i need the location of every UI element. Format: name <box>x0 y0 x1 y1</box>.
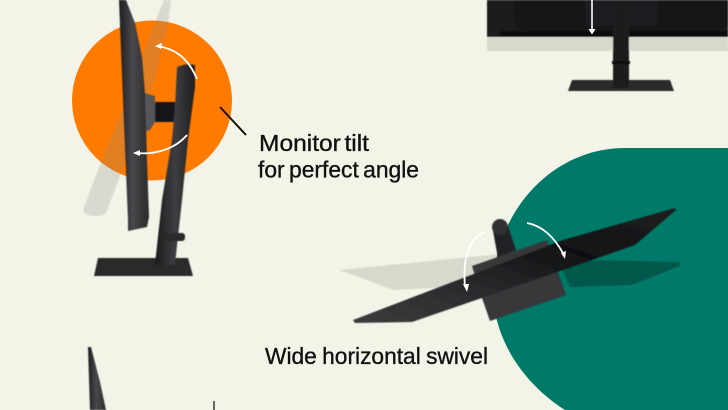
callout line: tilt <box>220 107 246 135</box>
swivel monitor panel <box>353 208 676 323</box>
arrow: tilt forward <box>136 135 187 153</box>
stand mount plate <box>585 0 657 26</box>
panel: orange circle behind tilt monitor <box>72 20 232 180</box>
icon: stand tip, bottom <box>213 401 215 410</box>
stand base <box>568 80 674 91</box>
text: monitor tilt caption <box>258 130 419 182</box>
height lock clip <box>164 233 185 241</box>
icon: swivel ghost shadow on green <box>560 260 680 287</box>
icon: monitor side sliver, bottom left <box>88 347 106 410</box>
panel: green rounded shape <box>493 148 728 410</box>
arrow: tilt back <box>157 46 197 79</box>
text: swivel caption: Wide horizontal swivel <box>265 343 488 369</box>
icon: monitor side view for tilt <box>94 0 195 276</box>
arrow: height down <box>588 0 596 34</box>
monitor stand base <box>94 258 193 276</box>
icon: monitor top view for swivel <box>353 208 676 323</box>
arrow: swivel right <box>527 223 564 255</box>
ghost panel lowered <box>487 37 728 51</box>
monitor panel side <box>119 0 149 231</box>
text: monitor tilt caption: for perfect angle <box>258 156 419 182</box>
icon: monitor height panel, top right <box>487 0 728 91</box>
monitor back panel <box>487 0 728 37</box>
icon: swivel ghost monitor <box>339 254 500 290</box>
swivel stand neck <box>493 226 516 258</box>
swivel stand base plate <box>472 240 566 321</box>
monitor stand column <box>155 64 195 266</box>
stand column <box>613 0 629 88</box>
hinge arm <box>150 102 175 122</box>
text: monitor tilt caption: Monitor tilt <box>259 130 370 156</box>
monitor back lower edge <box>500 31 728 37</box>
icon: tilted ghost monitor <box>84 0 171 216</box>
monitor back recess <box>514 0 728 31</box>
swivel stand top <box>492 219 508 235</box>
hinge mount <box>144 93 155 132</box>
arrow: swivel left <box>464 232 486 287</box>
stand collar <box>612 61 630 64</box>
